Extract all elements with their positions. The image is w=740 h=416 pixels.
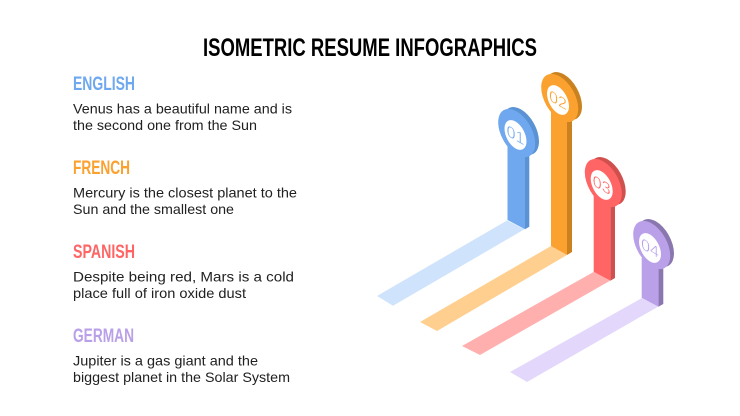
shadow: red (462, 272, 610, 355)
heading: English: ENGLISH (73, 74, 135, 95)
text block: English (73, 74, 292, 133)
pin 03: red (462, 149, 626, 355)
shadow: purple (510, 298, 658, 382)
pin 02: orange (420, 64, 582, 331)
shadow: orange (420, 246, 567, 331)
description: German: biggest planet in the Solar System (73, 369, 290, 385)
shadow: blue (377, 220, 524, 306)
description: Spanish: Despite being red, Mars is a cold (73, 268, 294, 284)
description: French: Sun and the smallest one (73, 201, 234, 217)
description: Spanish: place full of iron oxide dust (73, 285, 246, 301)
number 01: 01 (507, 121, 524, 149)
number 02: 02 (549, 86, 567, 114)
pin 04: purple (510, 211, 674, 382)
description: English: the second one from the Sun (73, 117, 257, 133)
description: French: Mercury is the closest planet to the (73, 184, 297, 200)
title: ISOMETRIC RESUME INFOGRAPHICS (203, 34, 537, 62)
description: German: Jupiter is a gas giant and the (73, 352, 258, 368)
heading: Spanish: SPANISH (73, 242, 135, 263)
text block: French (73, 158, 297, 217)
heading: German: GERMAN (73, 326, 134, 347)
description: English: Venus has a beautiful name and is (73, 100, 292, 116)
text block: Spanish (73, 242, 294, 301)
number 03: 03 (593, 171, 611, 199)
text block: German (73, 326, 290, 385)
heading: French: FRENCH (73, 158, 130, 179)
number 04: 04 (641, 234, 659, 263)
pin 01: blue (377, 99, 539, 306)
